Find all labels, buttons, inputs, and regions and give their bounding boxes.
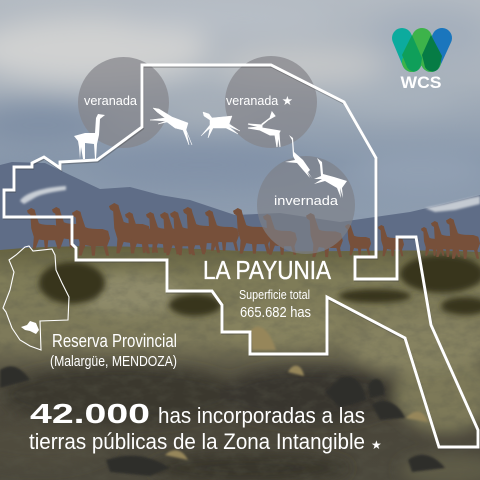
icon: bird-like guanaco petroglyph two bbox=[314, 158, 347, 198]
reserve location bbox=[21, 321, 39, 334]
label: invernada: invernada bbox=[274, 194, 338, 208]
icon: standing guanaco petroglyph bbox=[74, 114, 105, 159]
WCS logo bbox=[400, 35, 442, 92]
circle: veranada bbox=[78, 57, 169, 148]
bushes and rocks bbox=[0, 255, 480, 476]
guanaco herd bbox=[27, 203, 480, 259]
icon: crouching guanaco petroglyph bbox=[248, 112, 280, 147]
headline line two: tierras públicas de la Zona Intangible bbox=[29, 429, 365, 454]
logo mark bbox=[402, 35, 442, 71]
big number: 42.000 bbox=[30, 398, 150, 429]
location subcaption: (Malargüe, MENDOZA) bbox=[50, 354, 177, 370]
total area value: 665.682 has bbox=[240, 305, 311, 321]
total area caption: Superficie total bbox=[239, 288, 310, 302]
circle: veranada star bbox=[225, 56, 317, 148]
headline line one: has incorporadas a las bbox=[158, 403, 365, 428]
reserve boundary outline bbox=[4, 65, 479, 448]
logo wordmark: WCS bbox=[400, 73, 442, 92]
photo background: ground bbox=[0, 246, 480, 480]
label: veranada star: veranada ★ bbox=[226, 94, 293, 108]
mountains bbox=[0, 162, 480, 260]
photo background: sky bbox=[0, 0, 480, 270]
icon: running guanaco petroglyph bbox=[201, 112, 240, 138]
label: veranada: veranada bbox=[84, 94, 137, 108]
map: Mendoza province with reserve bbox=[3, 246, 69, 350]
title: La Payunia: LA PAYUNIA bbox=[203, 255, 332, 285]
circle: invernada bbox=[257, 156, 355, 254]
star marker: ★ bbox=[371, 438, 382, 452]
location caption: Reserva Provincial bbox=[52, 330, 177, 351]
icon: leaping guanaco petroglyph bbox=[150, 108, 192, 145]
icon: bird-like guanaco petroglyph bbox=[285, 135, 312, 178]
